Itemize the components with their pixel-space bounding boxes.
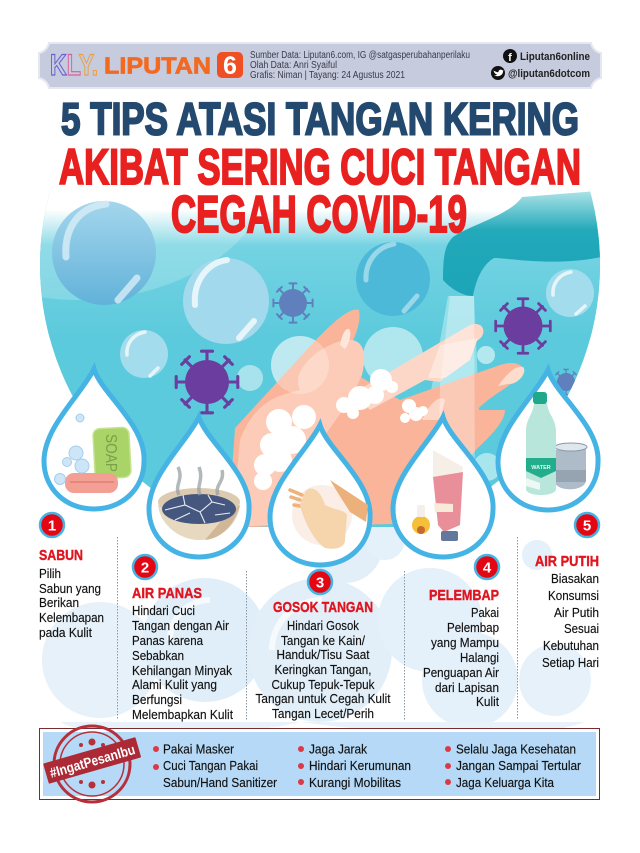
body: Tangan ke Kain/ [281, 633, 365, 648]
badge 2: 2 [141, 560, 149, 576]
logo: KLY: KLY. [50, 49, 98, 82]
heading: AIR PANAS [132, 585, 202, 602]
body: Biasakan [551, 571, 599, 586]
body: Tangan untuk Cegah Kulit [256, 691, 391, 706]
bullets: column 1 [153, 742, 278, 790]
title: CEGAH COVID-19 [171, 186, 467, 244]
body: Sesuai [564, 621, 599, 636]
bullets: column 2: Hindari Kerumunan [309, 758, 411, 773]
body [256, 618, 391, 721]
icon: twitter [491, 66, 505, 80]
virus: blue [273, 283, 313, 323]
badge 5 [575, 513, 599, 537]
pale soap bubbles behind text [42, 507, 591, 736]
bullets: column 3 [445, 742, 582, 790]
body: Konsumsi [548, 588, 599, 603]
body: Tangan dengan Air [132, 618, 230, 633]
bubble: large blue [52, 201, 156, 305]
body: Handuk/Tisu Saat [276, 647, 370, 662]
body: Sebabkan [132, 648, 184, 663]
bullets: column 1: Cuci Tangan Pakai [163, 758, 258, 773]
bullets: column 2 [298, 742, 411, 790]
divider lines [118, 537, 518, 720]
icon: facebook [503, 49, 517, 64]
water stream [431, 296, 480, 410]
source credits [250, 50, 470, 81]
drop 2: hot water [149, 417, 249, 557]
body: Kelembapan [39, 610, 104, 625]
tip 1: sabun [39, 513, 104, 640]
body: Cukup Tepuk-Tepuk [272, 677, 375, 692]
tip 5: air putih [535, 513, 599, 670]
bullets: column 3: Jaga Keluarga Kita [456, 775, 555, 790]
body [132, 603, 233, 722]
badge 3: 3 [316, 574, 324, 592]
icon: facebook: f [508, 52, 512, 64]
badge 3 [308, 570, 332, 594]
source credits: Olah Data: Anri Syaiful [250, 60, 337, 71]
body: Kulit [476, 694, 499, 709]
body: yang Mampu [431, 635, 499, 650]
icon: hands and towel [290, 480, 368, 549]
source credits: Grafis: Niman | Tayang: 24 Agustus 2021 [250, 70, 405, 81]
body: Kebutuhan [543, 638, 599, 653]
body: Berfungsi [132, 692, 182, 707]
heading: GOSOK TANGAN [273, 599, 373, 616]
heading: PELEMBAP [429, 587, 499, 604]
icon: cream tube and bottle [412, 450, 463, 541]
source credits: Sumber Data: Liputan6.com, IG @satgasperubahanperilaku [250, 50, 470, 61]
virus: blue behind drop [553, 369, 579, 395]
drop 5: water [498, 370, 598, 510]
heading: AIR PUTIH [535, 553, 599, 570]
badge 1: 1 [48, 518, 56, 534]
logo: LIPUTAN: LIPUTAN [104, 52, 211, 78]
icon: soap bars: SOAP [102, 434, 119, 472]
panel: washing illustration background [30, 190, 610, 527]
drop 1: soap [44, 369, 144, 509]
tip 2: air panas [132, 555, 233, 722]
facebook handle: Liputan6online [520, 51, 590, 63]
stamp [43, 726, 141, 802]
virus: purple left [176, 351, 238, 413]
bullets: column 1: Sabun/Hand Sanitizer [163, 775, 278, 790]
virus: purple right [496, 299, 550, 353]
bubble: darker right [356, 242, 430, 316]
body: Pilih [39, 566, 61, 581]
title [59, 94, 581, 244]
body: Sabun yang [39, 581, 101, 596]
body: Pelembap [447, 620, 499, 635]
badge 2 [133, 555, 157, 579]
body [423, 605, 500, 709]
bullets: column 1: Pakai Masker [163, 742, 235, 756]
body: Tangan Lecet/Perih [272, 706, 374, 721]
body [542, 571, 599, 670]
tip 3: gosok tangan [256, 570, 391, 721]
tip 4: pelembap [423, 555, 500, 709]
logo: 6 box: 6 [223, 52, 237, 80]
bullets: column 3: Selalu Jaga Kesehatan [456, 742, 576, 756]
icon: cracked bowl with steam [158, 467, 240, 540]
body: Air Putih [554, 605, 599, 620]
badge 5: 5 [583, 518, 591, 534]
body: Keringkan Tangan, [274, 662, 372, 677]
body: Pakai [471, 605, 499, 620]
body: Hindari Gosok [287, 618, 359, 633]
body: Halangi [460, 650, 499, 665]
body: Melembapkan Kulit [132, 707, 233, 722]
body: dari Lapisan [435, 680, 499, 695]
drop 3: rub hands [270, 425, 370, 565]
body: Penguapan Air [423, 665, 500, 680]
body: Hindari Cuci [132, 603, 195, 618]
bullets: column 2: Jaga Jarak [309, 742, 367, 756]
body: Setiap Hari [542, 655, 599, 670]
bubble: small right [546, 269, 594, 317]
badge 4 [475, 555, 499, 579]
body: pada Kulit [39, 625, 92, 640]
bullets: column 3: Jangan Sampai Tertular [456, 758, 582, 773]
body [39, 566, 104, 640]
bullets: column 2: Kurangi Mobilitas [309, 775, 401, 790]
stamp: #IngatPesanIbu [48, 741, 137, 781]
icon: bottle and glass: WATER [531, 465, 551, 471]
drop 4: moisturizer [393, 417, 493, 557]
body: Berikan [39, 595, 79, 610]
body: Kehilangan Minyak [132, 663, 232, 678]
panel: reminder box [40, 726, 600, 802]
bubble: small left [120, 330, 168, 378]
body: Alami Kulit yang [132, 677, 217, 692]
soap foam [254, 369, 428, 490]
logo: 6 box [217, 52, 243, 80]
body: Panas karena [132, 633, 204, 648]
hands [232, 296, 524, 527]
badge 4: 4 [483, 560, 492, 576]
twitter handle: @liputan6dotcom [508, 68, 590, 80]
faucet [443, 190, 610, 296]
heading: SABUN [39, 547, 83, 564]
bubble: pale medium [183, 258, 269, 344]
header banner [39, 43, 601, 88]
